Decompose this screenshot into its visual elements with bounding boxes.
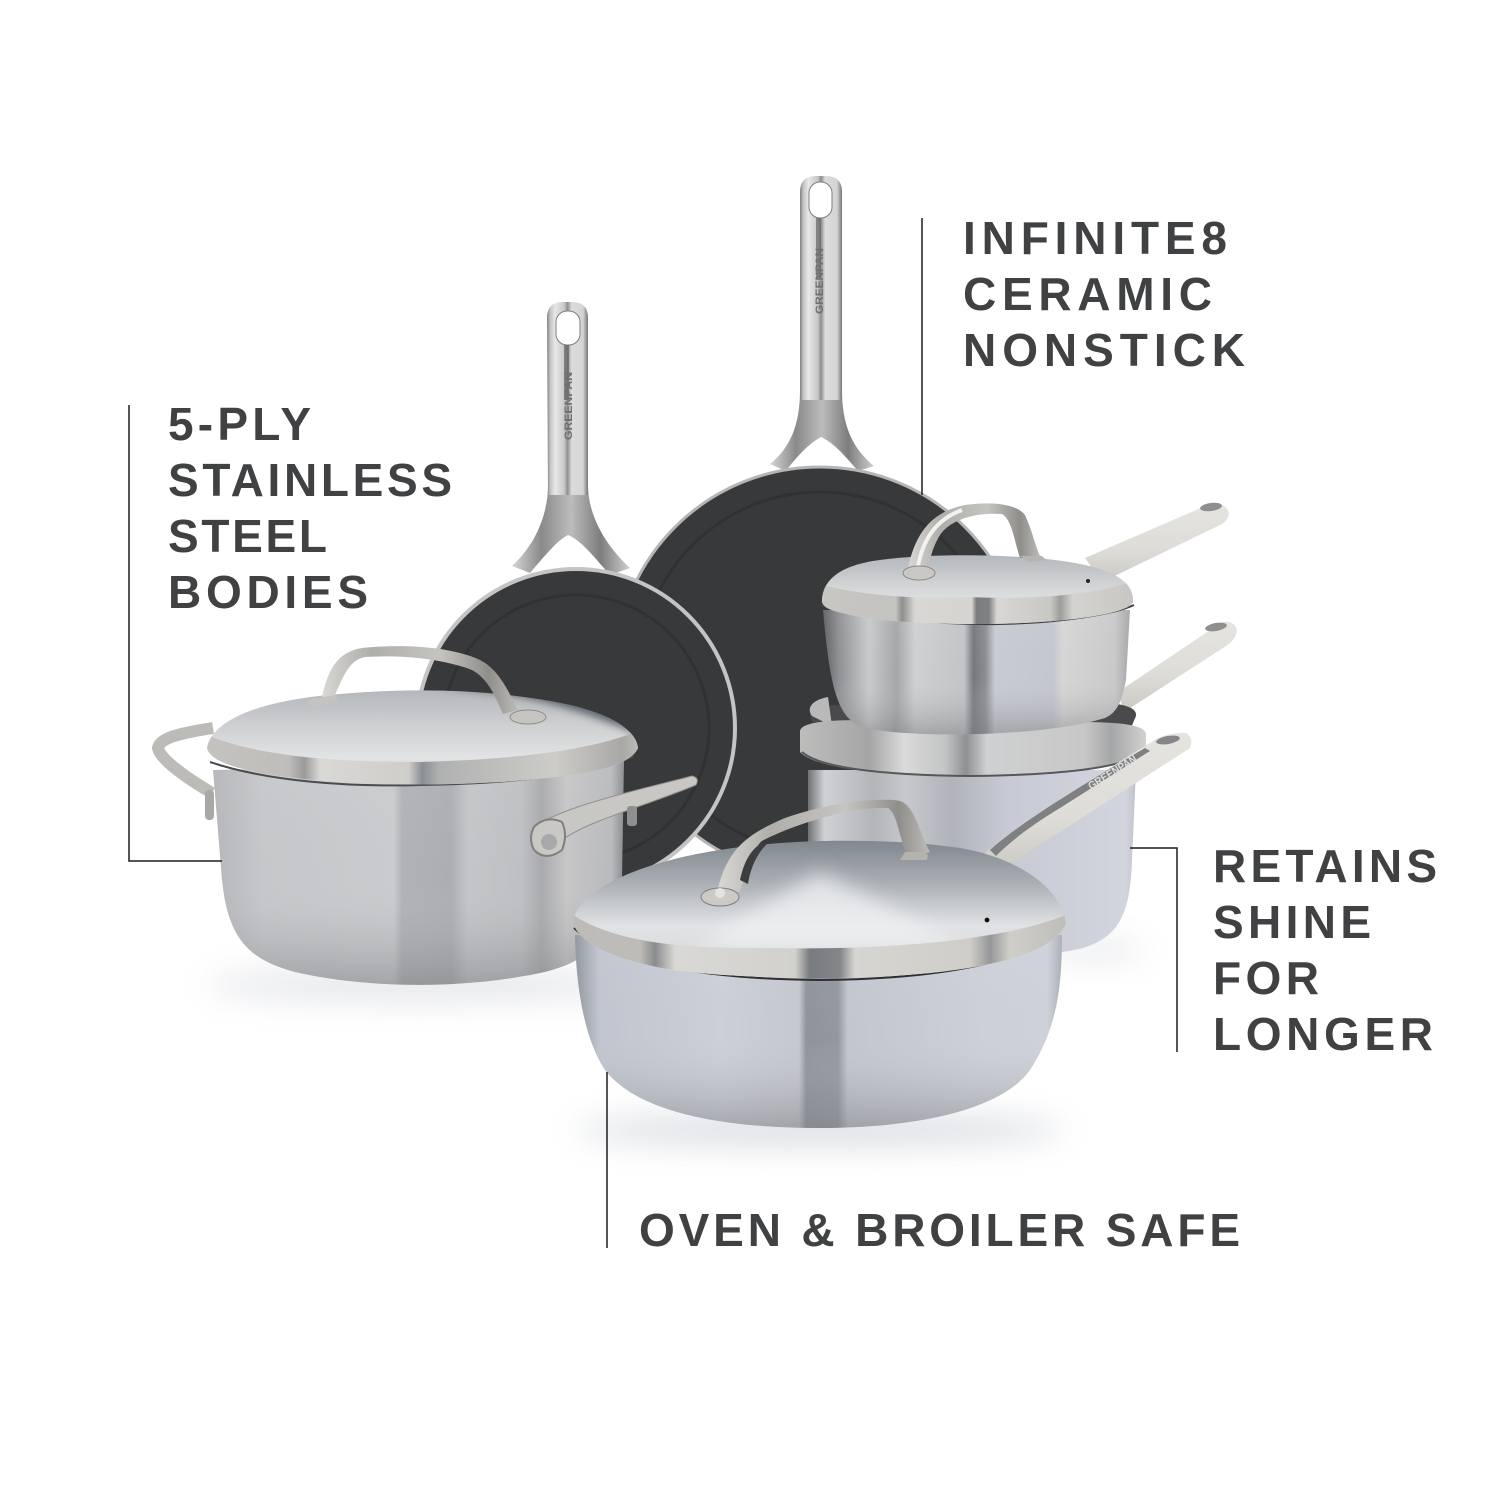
saute pan with lid (570, 733, 1191, 1128)
long handle: saute pan (985, 733, 1191, 876)
infographic canvas (128, 176, 1436, 1248)
callout: 5-ply stainless steel bodies: 5-PLY (168, 398, 311, 450)
lid: stockpot (207, 690, 638, 784)
callout: retains shine for longer (1130, 840, 1437, 1060)
side rivet: left (205, 790, 214, 820)
saucepan: middle, stacked (800, 621, 1237, 958)
callout: Infinite8 ceramic nonstick: NONSTICK (963, 324, 1245, 376)
callout: retains shine for longer: FOR (1213, 952, 1319, 1004)
callout: 5-ply stainless steel bodies (129, 398, 452, 861)
pot body (213, 760, 624, 985)
lid: saute pan (570, 841, 1070, 985)
callout: oven and broiler safe: OVEN & BROILER SAFE (639, 1204, 1240, 1256)
long handle: middle saucepan (1118, 622, 1237, 712)
callout: retains shine for longer: LONGER (1213, 1008, 1433, 1060)
lid handle: stockpot (307, 646, 546, 724)
frying pan: large (615, 176, 1025, 877)
pan body (575, 935, 1062, 1128)
callout: Infinite8 ceramic nonstick (922, 212, 1245, 495)
side handle: right (531, 776, 697, 856)
callout: Infinite8 ceramic nonstick: INFINITE8 (963, 212, 1227, 264)
callout: Infinite8 ceramic nonstick: CERAMIC (963, 268, 1212, 320)
handle: large pan (770, 176, 874, 471)
lid handle: saute pan (701, 800, 930, 906)
callout: retains shine for longer: RETAINS (1213, 840, 1437, 892)
floor shadows (205, 940, 1145, 1146)
frying pan: small (417, 302, 735, 887)
lid handle: top saucepan (903, 503, 1046, 580)
lid: top saucepan (820, 555, 1136, 630)
callout: retains shine for longer: SHINE (1213, 896, 1371, 948)
handle: large pan: GREENPAN (814, 248, 826, 314)
handle: small pan: GREENPAN (563, 372, 575, 440)
stockpot with lid (158, 646, 697, 985)
loop handle: left (158, 728, 213, 793)
handle: small pan (512, 302, 630, 575)
long handle: saute pan: GREENPAN (1086, 753, 1139, 793)
long handle: top saucepan (1085, 504, 1229, 582)
callout: 5-ply stainless steel bodies: STAINLESS (168, 454, 452, 506)
callout: 5-ply stainless steel bodies: BODIES (168, 566, 368, 618)
saucepan: top, lidded (820, 502, 1229, 734)
callout: 5-ply stainless steel bodies: STEEL (168, 510, 327, 562)
